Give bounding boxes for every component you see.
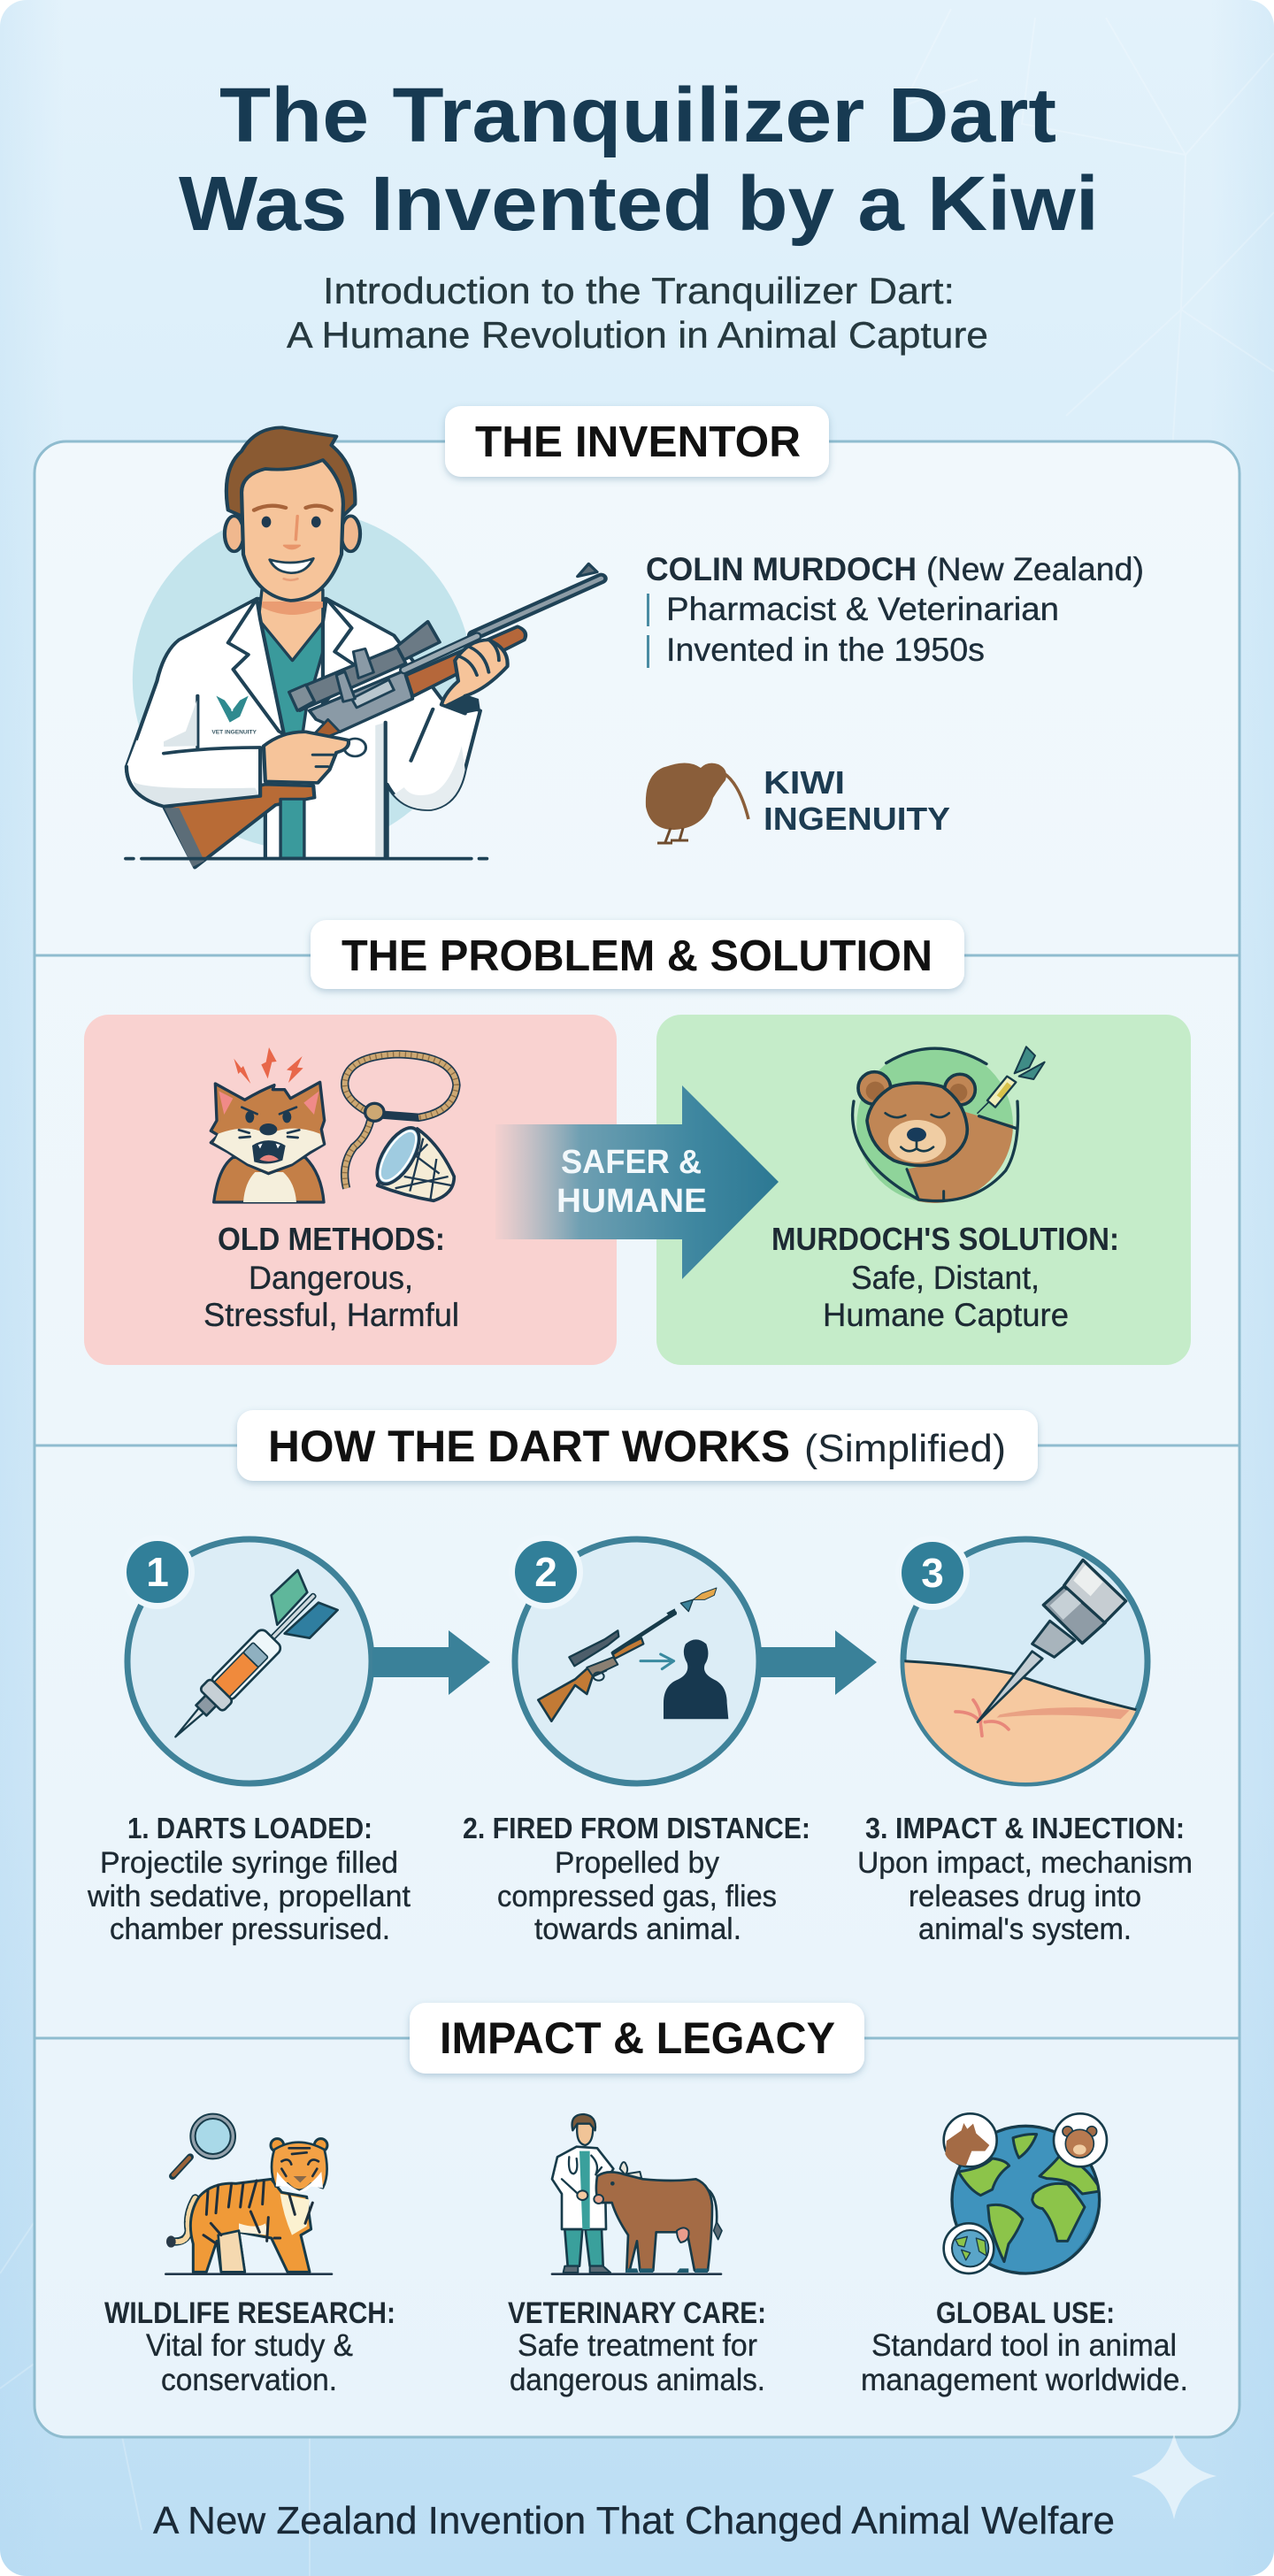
hands xyxy=(441,640,508,714)
step 3 text: animal's system. xyxy=(918,1913,1132,1946)
wildlife research text: Vital for study & xyxy=(146,2328,353,2363)
panel: murdoch's solution xyxy=(656,1015,1191,1365)
old methods text xyxy=(203,1221,459,1333)
title: The Tranquilizer Dart xyxy=(219,73,1056,158)
number badge 2 xyxy=(509,1535,583,1609)
heading: how the dart works xyxy=(237,1410,1038,1481)
icon: dart syringe xyxy=(164,1570,338,1748)
number badge 3: 3 xyxy=(921,1550,944,1596)
panel: old methods xyxy=(84,1015,617,1365)
wildlife research text xyxy=(104,2296,395,2397)
step 2 text: towards animal. xyxy=(534,1913,741,1946)
rifle xyxy=(473,579,602,635)
step 3: injection circle xyxy=(895,1536,1147,1791)
old methods text: OLD METHODS: xyxy=(218,1221,445,1257)
number badge 3 xyxy=(895,1536,970,1610)
heading: problem and solution: THE PROBLEM & SOLUTION xyxy=(342,932,932,980)
subtitle: A Humane Revolution in Animal Capture xyxy=(287,314,988,356)
inventor details: Invented in the 1950s xyxy=(666,632,985,668)
heading: the inventor xyxy=(445,406,829,477)
arrow: step 1 to 2 xyxy=(372,1630,490,1695)
step 2 text: 2. FIRED FROM DISTANCE: xyxy=(463,1812,810,1844)
kiwi ingenuity label: KIWI xyxy=(764,764,845,801)
wildlife research text: conservation. xyxy=(161,2363,337,2397)
icon: needle entering skin xyxy=(902,1560,1139,1791)
inventor details xyxy=(646,551,1144,668)
global use text xyxy=(861,2296,1188,2397)
step 1 text: chamber pressurised. xyxy=(110,1913,390,1946)
heading: impact and legacy: IMPACT & LEGACY xyxy=(440,2013,835,2063)
icon: kiwi bird xyxy=(646,763,748,843)
icon: rifle and target xyxy=(538,1588,728,1721)
section dividers xyxy=(35,955,1239,2038)
kiwi ingenuity label xyxy=(764,764,950,837)
step 2 text xyxy=(463,1812,810,1946)
solution text xyxy=(771,1221,1119,1333)
global use text: Standard tool in animal xyxy=(871,2328,1177,2363)
step 1 text xyxy=(87,1812,411,1946)
heading: problem and solution xyxy=(311,920,964,989)
step 1: syringe dart circle xyxy=(120,1535,372,1783)
icon: tiger with magnifier xyxy=(165,2116,332,2274)
sparkle xyxy=(1132,2433,1216,2519)
head xyxy=(226,427,355,516)
heading: the inventor: THE INVENTOR xyxy=(475,418,801,466)
step 3 text xyxy=(857,1812,1193,1946)
title xyxy=(179,73,1099,247)
icon: rope lasso xyxy=(345,1054,457,1188)
kiwi ingenuity label: INGENUITY xyxy=(764,801,950,837)
inventor details: (New Zealand) xyxy=(926,551,1144,587)
arrow: safer and humane xyxy=(495,1085,779,1279)
footer tagline: A New Zealand Invention That Changed Animal Welfare xyxy=(153,2499,1115,2542)
step 1 text: Projectile syringe filled xyxy=(100,1846,398,1880)
coat logo xyxy=(211,696,257,735)
veterinary care text: dangerous animals. xyxy=(510,2363,765,2397)
number badge 2: 2 xyxy=(534,1549,557,1595)
global use text: GLOBAL USE: xyxy=(936,2296,1115,2330)
heading: how the dart works: (Simplified) xyxy=(804,1427,1006,1470)
veterinary care text xyxy=(508,2296,766,2397)
step 2 text: compressed gas, flies xyxy=(497,1880,777,1913)
solution text: Humane Capture xyxy=(823,1297,1069,1333)
subtitle: Introduction to the Tranquilizer Dart: xyxy=(323,270,955,311)
icon: globe with animals xyxy=(944,2113,1107,2276)
icon: angry animal xyxy=(211,1047,325,1202)
inventor details: Pharmacist & Veterinarian xyxy=(666,591,1059,627)
heading: how the dart works: HOW THE DART WORKS xyxy=(268,1422,790,1471)
arrow: safer and humane: SAFER & xyxy=(561,1144,702,1181)
main panel xyxy=(35,441,1239,2437)
title: Was Invented by a Kiwi xyxy=(179,161,1099,247)
number badge 1: 1 xyxy=(146,1549,169,1595)
veterinary care text: VETERINARY CARE: xyxy=(508,2296,766,2330)
step 1 text: with sedative, propellant xyxy=(87,1880,411,1913)
step 3 text: releases drug into xyxy=(909,1880,1141,1913)
number badge 1 xyxy=(120,1535,195,1609)
step 2: rifle circle xyxy=(509,1535,759,1783)
icon: vet with cow xyxy=(552,2114,722,2274)
step 3 text: Upon impact, mechanism xyxy=(857,1846,1193,1880)
old methods text: Dangerous, xyxy=(249,1260,413,1296)
arrow: safer and humane: HUMANE xyxy=(556,1183,707,1220)
illustration: inventor with rifle xyxy=(126,427,602,868)
heading: impact and legacy xyxy=(410,2003,864,2074)
step 1 text: 1. DARTS LOADED: xyxy=(127,1812,372,1844)
global use text: management worldwide. xyxy=(861,2363,1188,2397)
solution text: MURDOCH'S SOLUTION: xyxy=(771,1221,1119,1257)
icon: sleeping bear with dart xyxy=(853,1046,1045,1203)
veterinary care text: Safe treatment for xyxy=(518,2328,757,2363)
old methods text: Stressful, Harmful xyxy=(203,1297,459,1333)
step 2 text: Propelled by xyxy=(555,1846,719,1880)
inventor details: COLIN MURDOCH xyxy=(646,551,917,587)
subtitle xyxy=(287,270,988,356)
arrow: step 2 to 3 xyxy=(760,1630,877,1695)
coat logo: VET INGENUITY xyxy=(211,730,257,735)
solution text: Safe, Distant, xyxy=(851,1260,1040,1296)
icon: capture net xyxy=(369,1121,454,1200)
wildlife research text: WILDLIFE RESEARCH: xyxy=(104,2296,395,2330)
step 3 text: 3. IMPACT & INJECTION: xyxy=(865,1812,1185,1844)
